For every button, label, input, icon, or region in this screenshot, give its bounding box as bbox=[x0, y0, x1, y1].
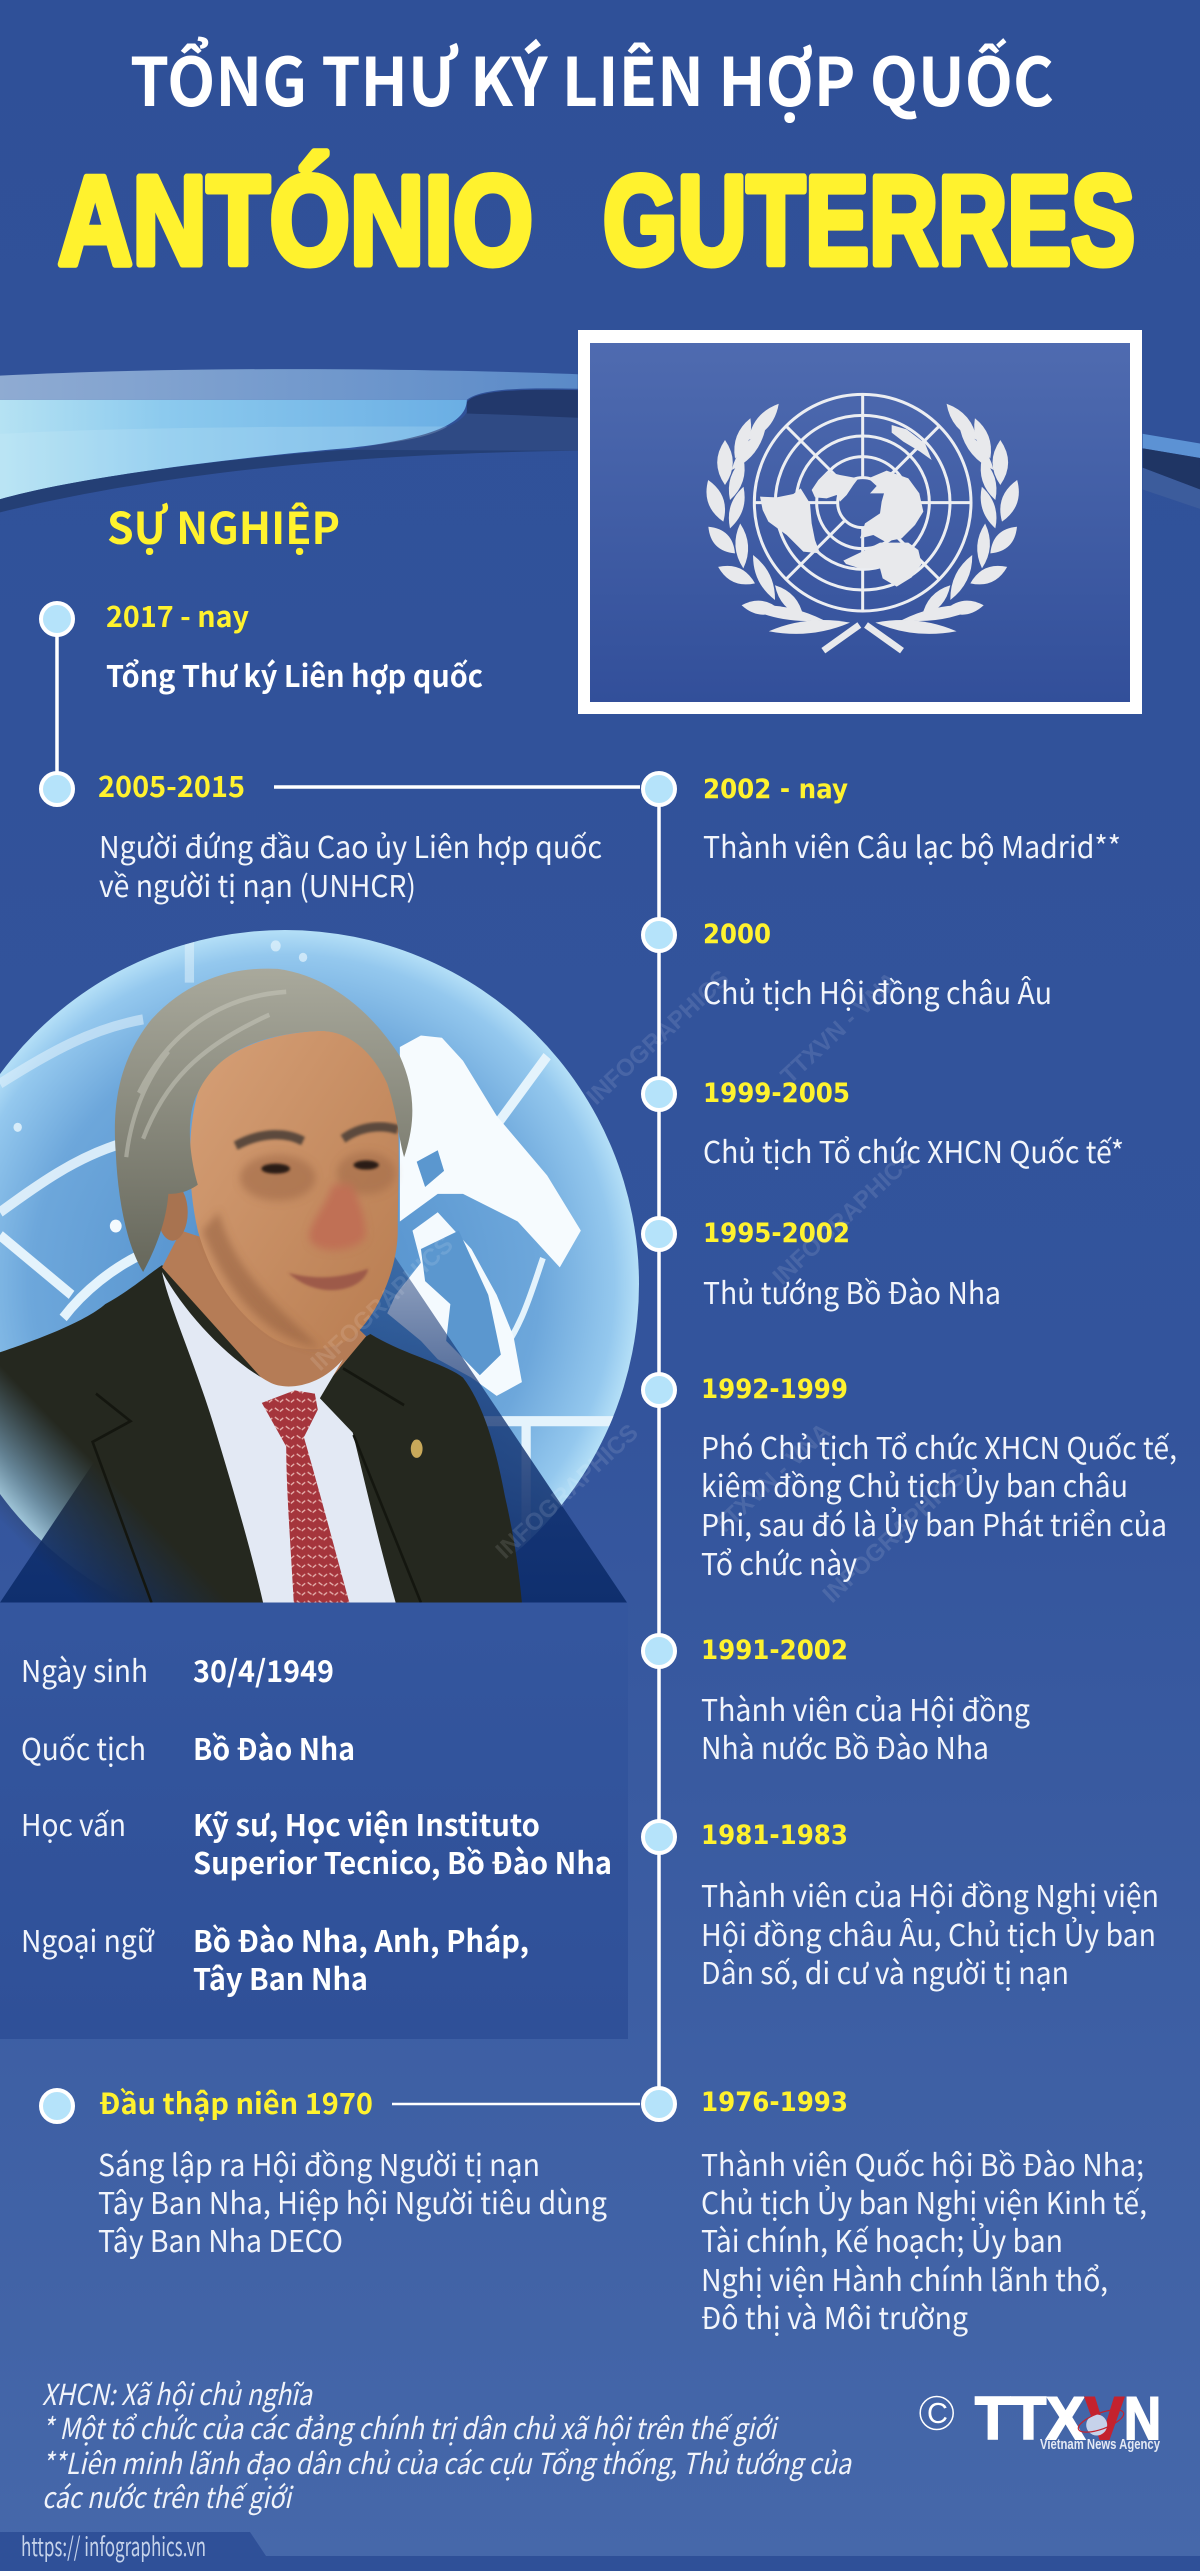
watermarks bbox=[306, 965, 971, 1608]
entry 1991-2002 bbox=[643, 1635, 1030, 1768]
entry 1981-1983: 1981-1983 bbox=[701, 1820, 848, 1851]
row: education: Kỹ sư, Học viện Instituto bbox=[193, 1801, 540, 1845]
row: languages: Ngoại ngữ bbox=[21, 1917, 155, 1961]
portrait: António Guterres illustration bbox=[0, 969, 522, 1603]
facial shading bbox=[202, 1152, 396, 1348]
hair bbox=[115, 969, 412, 1272]
entry 1992-1999 bbox=[643, 1374, 1177, 1584]
entry 1976-1993: Chủ tịch Ủy ban Nghị viện Kinh tế, bbox=[701, 2179, 1147, 2223]
name heading bbox=[58, 150, 1135, 291]
footer band bbox=[0, 2527, 1200, 2571]
title: TỔNG THƯ KÝ LIÊN HỢP QUỐC bbox=[130, 29, 1054, 126]
watermarks: INFOGRAPHICS bbox=[491, 1419, 644, 1564]
watermarks: INFOGRAPHICS bbox=[818, 1463, 971, 1608]
logo: TTXVN: Vietnam News Agency bbox=[1040, 2436, 1160, 2453]
entry 1992-1999: Tổ chức này bbox=[701, 1540, 857, 1584]
pin bbox=[411, 1440, 423, 1458]
dark triangle behind portrait bbox=[0, 1135, 627, 1602]
row: birth date bbox=[21, 1647, 334, 1691]
row: birth date: 30/4/1949 bbox=[193, 1647, 334, 1691]
row: languages: Tây Ban Nha bbox=[193, 1955, 368, 1999]
face bbox=[190, 1031, 399, 1349]
watermarks: INFOGRAPHICS bbox=[306, 1231, 459, 1376]
logo: TTXVN: V bbox=[1085, 2385, 1124, 2452]
entry 1976-1993: Đô thị và Môi trường bbox=[701, 2294, 968, 2338]
entry 1991-2002: Thành viên của Hội đồng bbox=[701, 1686, 1030, 1730]
watermarks: TTXVN - VNA bbox=[708, 1418, 836, 1540]
entry 1976-1993: Tài chính, Kế hoạch; Ủy ban bbox=[701, 2217, 1063, 2261]
entry 1976-1993: Nghị viện Hành chính lãnh thổ, bbox=[701, 2256, 1108, 2300]
decorative wave left bbox=[0, 369, 578, 512]
entry 2005-2015: 2005-2015 bbox=[98, 764, 245, 806]
entry 1976-1993: 1976-1993 bbox=[701, 2087, 848, 2118]
hair streaks bbox=[126, 992, 286, 1157]
row: education: Học vấn bbox=[21, 1801, 126, 1845]
footnotes: **Liên minh lãnh đạo dân chủ của các cựu Tổng thống, Thủ tướng của bbox=[42, 2441, 852, 2483]
footnotes: * Một tổ chức của các đảng chính trị dân chủ xã hội trên thế giới bbox=[42, 2406, 779, 2448]
entry 1981-1983: Hội đồng châu Âu, Chủ tịch Ủy ban bbox=[701, 1911, 1156, 1955]
entry 1981-1983 bbox=[643, 1820, 1159, 1993]
row: nationality: Quốc tịch bbox=[21, 1725, 146, 1769]
row: languages: Bồ Đào Nha, Anh, Pháp, bbox=[193, 1917, 529, 1961]
entry 2017: Tổng Thư ký Liên hợp quốc bbox=[106, 652, 483, 696]
info panel bbox=[0, 1602, 628, 2039]
footnotes bbox=[42, 2372, 852, 2517]
ear bbox=[161, 1192, 188, 1241]
entry 2017 bbox=[41, 594, 483, 696]
entry 1991-2002: Nhà nước Bồ Đào Nha bbox=[701, 1724, 989, 1768]
entry 1992-1999: Phi, sau đó là Ủy ban Phát triển của bbox=[701, 1501, 1167, 1545]
footnotes: các nước trên thế giới bbox=[42, 2475, 294, 2517]
entry 2005-2015: Người đứng đầu Cao ủy Liên hợp quốc bbox=[99, 823, 602, 867]
portrait: globe circle bbox=[0, 930, 639, 1552]
entry early 1970s: Đầu thập niên 1970 bbox=[99, 2081, 373, 2123]
UN flag bbox=[578, 330, 1142, 714]
source url: https:// infographics.vn bbox=[21, 2527, 206, 2564]
entry 1995-2002 bbox=[643, 1218, 1001, 1313]
entry 2005-2015 bbox=[41, 764, 602, 906]
entry 1999-2005: 1999-2005 bbox=[703, 1078, 850, 1109]
entry 1991-2002: 1991-2002 bbox=[701, 1635, 848, 1666]
entry 2002 - nay bbox=[643, 773, 1121, 867]
entry 2000: 2000 bbox=[703, 919, 771, 950]
entry 1981-1983: Thành viên của Hội đồng Nghị viện bbox=[701, 1872, 1159, 1916]
entry 1992-1999: kiêm đồng Chủ tịch Ủy ban châu bbox=[701, 1462, 1128, 1506]
row: nationality: Bồ Đào Nha bbox=[193, 1725, 355, 1769]
decorative wave right bbox=[1143, 434, 1200, 509]
entry 2005-2015: về người tị nạn (UNHCR) bbox=[99, 862, 416, 906]
entry 2000 bbox=[643, 919, 1052, 1013]
icon: UN emblem bbox=[701, 394, 1024, 651]
footnotes: XHCN: Xã hội chủ nghĩa bbox=[42, 2372, 313, 2414]
row: languages bbox=[21, 1917, 529, 1999]
row: education: Superior Tecnico, Bồ Đào Nha bbox=[193, 1839, 612, 1883]
watermarks: INFOGRAPHICS bbox=[768, 1145, 921, 1290]
timeline connector lines bbox=[57, 619, 659, 2104]
entry 1999-2005: Chủ tịch Tổ chức XHCN Quốc tế* bbox=[703, 1128, 1124, 1172]
entry early 1970s: Tây Ban Nha DECO bbox=[98, 2217, 343, 2261]
entry 2017: 2017 - nay bbox=[106, 594, 249, 636]
lapel shading bbox=[93, 1368, 421, 1603]
logo: TTXVN: C bbox=[927, 2398, 948, 2430]
suit bbox=[0, 1265, 522, 1603]
logo: TTXVN: TTX bbox=[975, 2385, 1085, 2452]
entry early 1970s: Tây Ban Nha, Hiệp hội Người tiêu dùng bbox=[98, 2179, 607, 2223]
eyes bbox=[261, 1164, 290, 1174]
entry 1976-1993: Thành viên Quốc hội Bồ Đào Nha; bbox=[701, 2141, 1144, 2185]
section heading: career: SỰ NGHIỆP bbox=[107, 493, 340, 557]
mouth bbox=[288, 1269, 368, 1290]
entry 2002 - nay: Thành viên Câu lạc bộ Madrid** bbox=[703, 823, 1121, 867]
entry 1999-2005 bbox=[643, 1078, 1124, 1172]
entry 1976-1993 bbox=[643, 2087, 1147, 2338]
entry early 1970s bbox=[41, 2081, 607, 2261]
tie bbox=[262, 1390, 349, 1603]
entry 2000: Chủ tịch Hội đồng châu Âu bbox=[703, 969, 1052, 1013]
row: nationality bbox=[21, 1725, 355, 1769]
logo: TTXVN bbox=[920, 2385, 1161, 2453]
entry 1995-2002: 1995-2002 bbox=[703, 1218, 850, 1249]
entry 1992-1999: Phó Chủ tịch Tổ chức XHCN Quốc tế, bbox=[701, 1424, 1177, 1468]
brows bbox=[236, 1127, 398, 1146]
watermarks: TTXVN - VNA bbox=[776, 967, 904, 1089]
shirt bbox=[162, 1272, 396, 1603]
row: birth date: Ngày sinh bbox=[21, 1647, 148, 1691]
logo: TTXVN: N bbox=[1124, 2385, 1161, 2452]
entry 1995-2002: Thủ tướng Bồ Đào Nha bbox=[703, 1269, 1001, 1313]
entry 1981-1983: Dân số, di cư và người tị nạn bbox=[701, 1949, 1069, 1993]
entry 1992-1999: 1992-1999 bbox=[701, 1374, 848, 1405]
name heading: ANTÓNIO bbox=[58, 150, 533, 291]
row: education bbox=[21, 1801, 612, 1883]
entry 2002 - nay: 2002 - nay bbox=[703, 774, 848, 805]
watermarks: INFOGRAPHICS bbox=[582, 965, 735, 1110]
neck bbox=[162, 1231, 366, 1387]
entry early 1970s: Sáng lập ra Hội đồng Người tị nạn bbox=[98, 2141, 540, 2185]
